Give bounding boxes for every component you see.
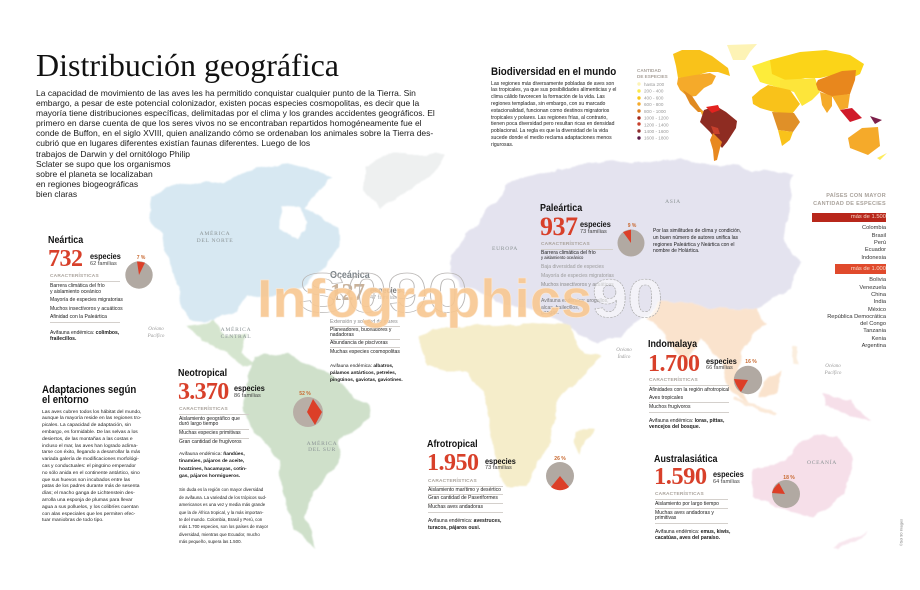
panel: Paleártica: alcas, frailecillos, bbox=[541, 305, 579, 311]
country list 1: Ecuador bbox=[865, 247, 886, 253]
country list 1: Perú bbox=[874, 240, 886, 246]
heading bbox=[42, 384, 136, 406]
legend: cantidad de especies: 800 - 1000 bbox=[644, 109, 666, 114]
text block: variada galería de modificaciones morfológi- bbox=[42, 457, 139, 462]
text block: estacionalidad, funcionan como destinos migratorios bbox=[491, 108, 609, 114]
heading: Paleártica bbox=[540, 202, 582, 214]
panel: Australasiática bbox=[654, 453, 800, 541]
panel: Neártica: Afinidad con la Paleártica bbox=[50, 314, 107, 320]
legend: cantidad de especies: hasta 200 bbox=[644, 82, 665, 87]
panel: Oceánica: nadadoras bbox=[330, 332, 354, 338]
ocean labels: Pacífico bbox=[147, 334, 165, 339]
panel: Neotropical: Gran cantidad de frugívoros bbox=[179, 439, 242, 445]
species count: 1.700 bbox=[648, 351, 700, 377]
endemic birds: Avifauna endémica: loras, pittas, bbox=[649, 418, 724, 424]
text block: cas y conductuales: el pingüino emperador bbox=[42, 464, 136, 469]
panel: Neártica: frailecillos. bbox=[50, 336, 76, 342]
panel: Afrotropical: especies bbox=[485, 456, 516, 466]
panel: Neotropical: duró largo tiempo bbox=[179, 421, 218, 427]
legend: cantidad de especies: 1200 - 1400 bbox=[644, 122, 669, 127]
intro text: mayoría tiene distribuciones específicas, delimitadas por el clima y los grandes accidentes geográficos. El bbox=[36, 108, 435, 118]
panel: Neártica: Mayoría de especies migratorias bbox=[50, 297, 123, 303]
panel: Paleártica: Avifauna endémica: urogallos, bbox=[541, 298, 609, 304]
country list 2: Venezuela bbox=[859, 285, 886, 291]
panel: Paleártica: 73 familias bbox=[580, 229, 607, 235]
panel: Indomalaya bbox=[648, 338, 762, 430]
country list 2: Tanzania bbox=[863, 328, 886, 334]
continent labels: AMÉRICA bbox=[200, 229, 230, 237]
legend: cantidad de especies: 400 - 600 bbox=[644, 96, 664, 100]
characteristics list: Aislamiento por largo tiempo bbox=[655, 501, 719, 507]
text block: Las aves cubren todos los hábitat del mundo, bbox=[42, 410, 141, 415]
panel: Afrotropical: Muchas aves andadoras bbox=[428, 504, 483, 510]
text block: agua a sus polluelos, y los colibríes cuentan bbox=[42, 505, 139, 510]
map: Africa bbox=[418, 323, 602, 487]
text block: regiones templadas, sin embargo, con su marcado bbox=[491, 101, 605, 107]
panel: Oceánica: Planeadores, buceadores y bbox=[330, 327, 391, 333]
endemic birds: hoatzines, hacamayas, cotin- bbox=[179, 467, 247, 472]
text block: Holártica note: un buen número de autores unifica las bbox=[653, 235, 738, 241]
endemic birds bbox=[179, 452, 247, 479]
text block: Holártica note bbox=[653, 228, 741, 254]
map: North America bbox=[149, 163, 340, 322]
pie chart 52% bbox=[293, 391, 323, 427]
endemic birds bbox=[330, 364, 403, 383]
watermark: Infographics bbox=[257, 269, 592, 329]
country list 2: México bbox=[868, 307, 886, 313]
species count: 937 bbox=[540, 212, 578, 241]
endemic birds: Avifauna endémica: emus, kiwis, bbox=[655, 529, 730, 535]
country list 2: del Congo bbox=[860, 321, 886, 327]
pie chart 16%: 16 % bbox=[745, 359, 757, 365]
panel: Afrotropical: 73 familias bbox=[485, 465, 512, 471]
panel: Paleártica: especies bbox=[580, 219, 611, 229]
text block: que sus huevos son incubados entre las bbox=[42, 478, 130, 483]
country list 2: China bbox=[871, 292, 886, 298]
text block bbox=[179, 487, 268, 544]
pie chart 9% bbox=[618, 223, 644, 256]
country list 1: Indonesia bbox=[861, 255, 886, 261]
panel: Australasiática: Muchas aves andadoras y bbox=[655, 510, 714, 516]
map: South and Southeast Asia bbox=[647, 303, 798, 416]
pie chart 18%: 18 % bbox=[783, 475, 795, 481]
panel: Neotropical: 86 familias bbox=[234, 393, 261, 399]
bar: más de 1.000 bbox=[835, 264, 886, 274]
continent labels: AMÉRICA bbox=[307, 439, 337, 447]
text block: tuar maniobras de todo tipo. bbox=[42, 518, 103, 523]
text block: rigurosas. bbox=[491, 142, 513, 148]
map: Eurasia bbox=[451, 160, 800, 343]
heading: Neártica bbox=[48, 234, 83, 246]
panel: Indomalaya: Aves tropicales bbox=[649, 395, 683, 401]
ocean labels: Índico bbox=[617, 354, 631, 360]
text block: arrolla una esponja de plumas para llevar bbox=[42, 498, 133, 503]
country list 1 bbox=[861, 225, 886, 261]
watermark: S090 bbox=[298, 261, 468, 324]
map: South America bbox=[243, 353, 368, 550]
panel: Paleártica: Mayoría de especies migratorias bbox=[541, 273, 614, 279]
panel: Indomalaya: Muchos frugívoros bbox=[649, 404, 691, 410]
country list 1: Colombia bbox=[862, 225, 886, 231]
watermark: 90 bbox=[592, 269, 663, 329]
endemic birds: tinamúes, pájaros de aceite, bbox=[179, 459, 244, 464]
intro text: bien claras bbox=[36, 189, 77, 199]
heading bbox=[813, 192, 886, 207]
intro text bbox=[36, 88, 435, 199]
heading: Neotropical bbox=[178, 367, 227, 379]
panel: Neártica: y aislamiento oceánico bbox=[50, 289, 101, 295]
species count: 127 bbox=[330, 280, 364, 306]
panel: Oceánica: Abundancia de piscívoras bbox=[330, 340, 388, 346]
endemic birds: Avifauna endémica: avestruces, bbox=[428, 518, 501, 524]
endemic birds: Avifauna endémica: ñandúes, bbox=[179, 452, 245, 457]
legend: cantidad de especies: 200 - 400 bbox=[644, 89, 664, 94]
characteristics list: Barrera climática del frío bbox=[541, 250, 596, 256]
characteristics list: Barrera climática del frío bbox=[50, 283, 105, 289]
continent labels: OCEANÍA bbox=[807, 458, 837, 466]
bar: más de 1.000: más de 1.000 bbox=[851, 266, 886, 272]
text block: las tropicales, ya que sus posibilidades alimenticias y el bbox=[491, 87, 616, 93]
endemic birds: gas, pájaros hormigueros. bbox=[179, 474, 240, 479]
panel: Australasiática: 64 familias bbox=[713, 479, 740, 485]
country list 2: Kenia bbox=[871, 336, 886, 342]
continent labels: EUROPA bbox=[492, 246, 518, 252]
ocean labels: Océano bbox=[616, 348, 632, 353]
pie chart 7% bbox=[125, 255, 153, 289]
panel: Neártica: CARACTERÍSTICAS bbox=[50, 274, 99, 279]
text block: con alas especiales que les permiten efec- bbox=[42, 512, 135, 517]
heading: PAÍSES CON MAYOR bbox=[826, 193, 886, 199]
endemic birds: pingüinos, gaviotas, gaviotines. bbox=[330, 378, 403, 383]
endemic birds: Avifauna endémica: albatros, bbox=[330, 364, 393, 369]
text block: más pequeño, supera las 1.500. bbox=[179, 539, 242, 544]
panel: Neotropical: CARACTERÍSTICAS bbox=[179, 407, 228, 412]
panel: Paleártica: Baja diversidad de especies bbox=[541, 264, 604, 270]
text block: Sin duda es la región con mayor diversidad bbox=[179, 487, 263, 492]
heading: Adaptaciones según bbox=[42, 384, 136, 396]
panel: Paleártica: y aislamiento oceánico bbox=[541, 255, 583, 260]
heading: Australasiática bbox=[654, 453, 718, 465]
text block: incluso el mar, las aves han logrado aclima- bbox=[42, 444, 138, 449]
panel: Neotropical bbox=[178, 367, 323, 544]
text block: aunque la mayoría reside en las regiones tro- bbox=[42, 416, 141, 421]
ocean labels bbox=[147, 327, 842, 376]
characteristics list: Afinidades con la región afrotropical bbox=[649, 387, 729, 393]
legend: cantidad de especies: CANTIDAD bbox=[637, 68, 662, 73]
text block: desiertos, de las montañas a las costas e bbox=[42, 437, 133, 442]
species count: 1.950 bbox=[427, 450, 478, 476]
panel: Afrotropical: turacos, pájaros ousi. bbox=[428, 525, 480, 531]
legend: cantidad de especies bbox=[637, 68, 669, 141]
panel: Paleártica: CARACTERÍSTICAS bbox=[541, 242, 590, 247]
legend: cantidad de especies: 1600 - 1800 bbox=[644, 136, 669, 141]
characteristics list: Aislamiento geográfico que bbox=[179, 416, 240, 422]
continent labels: AMÉRICA bbox=[221, 325, 251, 333]
intro text: trabajos de Darwin y del ornitólogo Philip bbox=[36, 149, 190, 159]
text block: tropicales y polares. Las regiones frías, al contrario, bbox=[491, 115, 608, 121]
endemic birds: Avifauna endémica: colimbos, bbox=[50, 330, 119, 336]
legend: cantidad de especies: DE ESPECIES bbox=[637, 74, 668, 79]
species count: 1.590 bbox=[654, 463, 707, 490]
characteristics list: Aislamiento marítimo y desértico bbox=[428, 487, 501, 493]
text block: clima cálido favorecen la formación de la vida. Las bbox=[491, 94, 605, 100]
text block: sucede donde el medio reclama adaptaciones menos bbox=[491, 135, 612, 141]
panel: Neotropical: Muchas especies primitivas bbox=[179, 430, 241, 436]
panel: Oceánica bbox=[330, 269, 403, 383]
panel: Neártica: especies bbox=[90, 251, 121, 261]
text block: más 1.700 especies, son los países de mayor bbox=[179, 524, 268, 529]
panel: Indomalaya: CARACTERÍSTICAS bbox=[649, 378, 698, 383]
text block: Las regiones más diversamente pobladas de aves son bbox=[491, 81, 614, 87]
panel: Afrotropical: CARACTERÍSTICAS bbox=[428, 479, 477, 484]
text block: no sólo anida en el continente antártico, sino bbox=[42, 471, 140, 476]
pie chart 26% bbox=[546, 456, 574, 490]
panel: países con mayor cantidad de especies bbox=[812, 192, 886, 349]
panel: Indomalaya: vencejos del bosque. bbox=[649, 424, 700, 430]
intro text: primero en darse cuenta de que los seres vivos no se encontraban repartidos homogéneamente fue el bbox=[36, 118, 422, 128]
heading: Afrotropical bbox=[427, 438, 478, 450]
panel: Australasiática: cacatúas, aves del paraíso. bbox=[655, 535, 720, 541]
ocean labels: Océano bbox=[148, 327, 164, 332]
panel: Adaptaciones según el entorno bbox=[42, 384, 142, 523]
heading: Oceánica bbox=[330, 269, 370, 281]
legend: cantidad de especies: 1400 - 1600 bbox=[644, 129, 669, 134]
legend: cantidad de especies: 1000 - 1200 bbox=[644, 116, 669, 121]
continent labels bbox=[197, 199, 837, 466]
continent labels: DEL NORTE bbox=[197, 238, 233, 244]
panel: Neártica bbox=[48, 234, 153, 342]
intro text: sobre el planeta se localizaban bbox=[36, 169, 153, 179]
panel: Paleártica: gangas. bbox=[541, 310, 559, 316]
country list 2: India bbox=[874, 299, 886, 305]
pie chart 26%: 26 % bbox=[554, 456, 566, 462]
country list 2: República Democrática bbox=[827, 314, 886, 320]
panel: Oceánica: 47 familias bbox=[370, 295, 397, 301]
text block: americanos es una vez y media más grande bbox=[179, 502, 265, 507]
panel: Australasiática: primitivas bbox=[655, 515, 676, 521]
text block: poblacional. La regla es que la diversidad de la vida bbox=[491, 128, 608, 134]
panel: Neotropical: especies bbox=[234, 383, 265, 393]
text block: Holártica note: nombre de Holártica. bbox=[653, 248, 699, 254]
text block bbox=[42, 410, 142, 523]
text block: patas de los padres durante más de sesenta bbox=[42, 484, 139, 489]
pie chart 9%: 9 % bbox=[628, 223, 637, 229]
text block: embargo, es formidable. De las selvas a los bbox=[42, 430, 138, 435]
text block: Holártica note: regiones Paleártica y Neártica con el bbox=[653, 242, 734, 248]
panel: Neártica: Muchos insectívoros y acuáticos bbox=[50, 306, 123, 312]
pie chart 18% bbox=[772, 475, 800, 508]
panel: Afrotropical: Gran cantidad de Paseriformes bbox=[428, 495, 498, 501]
panel: Indomalaya: 66 familias bbox=[706, 365, 733, 371]
pie chart 52%: 52 % bbox=[299, 391, 311, 397]
text block: que la de África tropical, y la más importan- bbox=[179, 510, 263, 515]
ocean labels: Océano bbox=[825, 364, 841, 369]
intro text: Sclater se supo que los organismos bbox=[36, 159, 171, 169]
heading: Biodiversidad en el mundo bbox=[491, 66, 616, 78]
panel: Oceánica: Muchas especies cosmopolitas bbox=[330, 349, 400, 355]
text block: te del mundo. Colombia, Brasil y Perú, con bbox=[179, 517, 262, 522]
bar: más de 1.500 bbox=[812, 213, 886, 222]
legend: cantidad de especies: 600 - 800 bbox=[644, 102, 664, 107]
inset Greenland bbox=[727, 44, 757, 60]
continent labels: DEL SUR bbox=[308, 447, 336, 453]
inset biodiversity world map bbox=[673, 44, 887, 161]
text block: diversidad, mientras que Ecuador, mucho bbox=[179, 532, 260, 537]
species count: 3.370 bbox=[178, 379, 229, 405]
country list 2: Argentina bbox=[862, 343, 886, 349]
bar: más de 1.500: más de 1.500 bbox=[851, 214, 886, 220]
text block: picales. La capacidad de adaptación, sin bbox=[42, 423, 131, 428]
pie chart 7%: 7 % bbox=[137, 255, 146, 261]
intro text: embargo, a pesar de este potencial colonizador, existen pocas especies cosmopolitas, es decir que la bbox=[36, 98, 419, 108]
ocean labels: Pacífico bbox=[824, 371, 842, 376]
text block: días; el macho ganga de Lichtenstein des- bbox=[42, 491, 135, 496]
text block bbox=[491, 81, 616, 148]
text block: Holártica note: Por las similitudes de clima y condición, bbox=[653, 228, 741, 234]
heading: el entorno bbox=[42, 394, 89, 406]
map: Greenland bbox=[366, 153, 446, 210]
species count: 732 bbox=[48, 246, 82, 272]
intro text: cubrió que en lugares diferentes existían faunas diferentes. Luego de los bbox=[36, 138, 310, 148]
panel: Afrotropical bbox=[427, 438, 574, 531]
continent labels: CENTRAL bbox=[221, 334, 251, 340]
intro text: La capacidad de movimiento de las aves les ha permitido conquistar cualquier punto de la Tierra. Sin bbox=[36, 88, 416, 98]
panel: Oceánica: especies bbox=[370, 285, 401, 295]
panel: Paleártica bbox=[540, 202, 644, 316]
continent labels: ASIA bbox=[665, 199, 681, 205]
characteristics list: Extensión y soledad de mares bbox=[330, 319, 398, 325]
map: Central America bbox=[189, 322, 257, 367]
heading: Indomalaya bbox=[648, 338, 697, 350]
panel: Australasiática: CARACTERÍSTICAS bbox=[655, 492, 704, 497]
country list 1: Brasil bbox=[872, 233, 886, 239]
panel: Australasiática: especies bbox=[713, 469, 744, 479]
credit: ©Sol 90 Images bbox=[900, 519, 904, 546]
title: Distribución geográfica bbox=[36, 47, 339, 83]
country list 2 bbox=[827, 277, 886, 349]
pie chart 16% bbox=[734, 359, 762, 394]
map: Australia and New Guinea bbox=[753, 393, 870, 550]
panel: Neártica: 62 familias bbox=[90, 261, 117, 267]
panel: Indomalaya: especies bbox=[706, 356, 737, 366]
intro text: conde de Buffon, en el siglo XVIII, quien analizando cómo se ordenaban los animales sobre la Tierra des- bbox=[36, 128, 433, 138]
text block: tienen poca diversidad pero resultan ricas en densidad bbox=[491, 121, 614, 127]
endemic birds: pálamos antárticos, petreles, bbox=[330, 371, 396, 376]
heading: CANTIDAD DE ESPECIES bbox=[813, 201, 886, 207]
country list 2: Bolivia bbox=[869, 277, 886, 283]
panel: Paleártica: Muchos insectívoros y acuáticos bbox=[541, 282, 614, 288]
intro text: en regiones biogeográficas bbox=[36, 179, 138, 189]
text block: tarse con éxito, llegando a desarrollar la más bbox=[42, 450, 140, 455]
text block: de avifauna. La variedad de los trópicos sud- bbox=[179, 495, 266, 500]
panel: Biodiversidad en el mundo bbox=[491, 66, 616, 148]
